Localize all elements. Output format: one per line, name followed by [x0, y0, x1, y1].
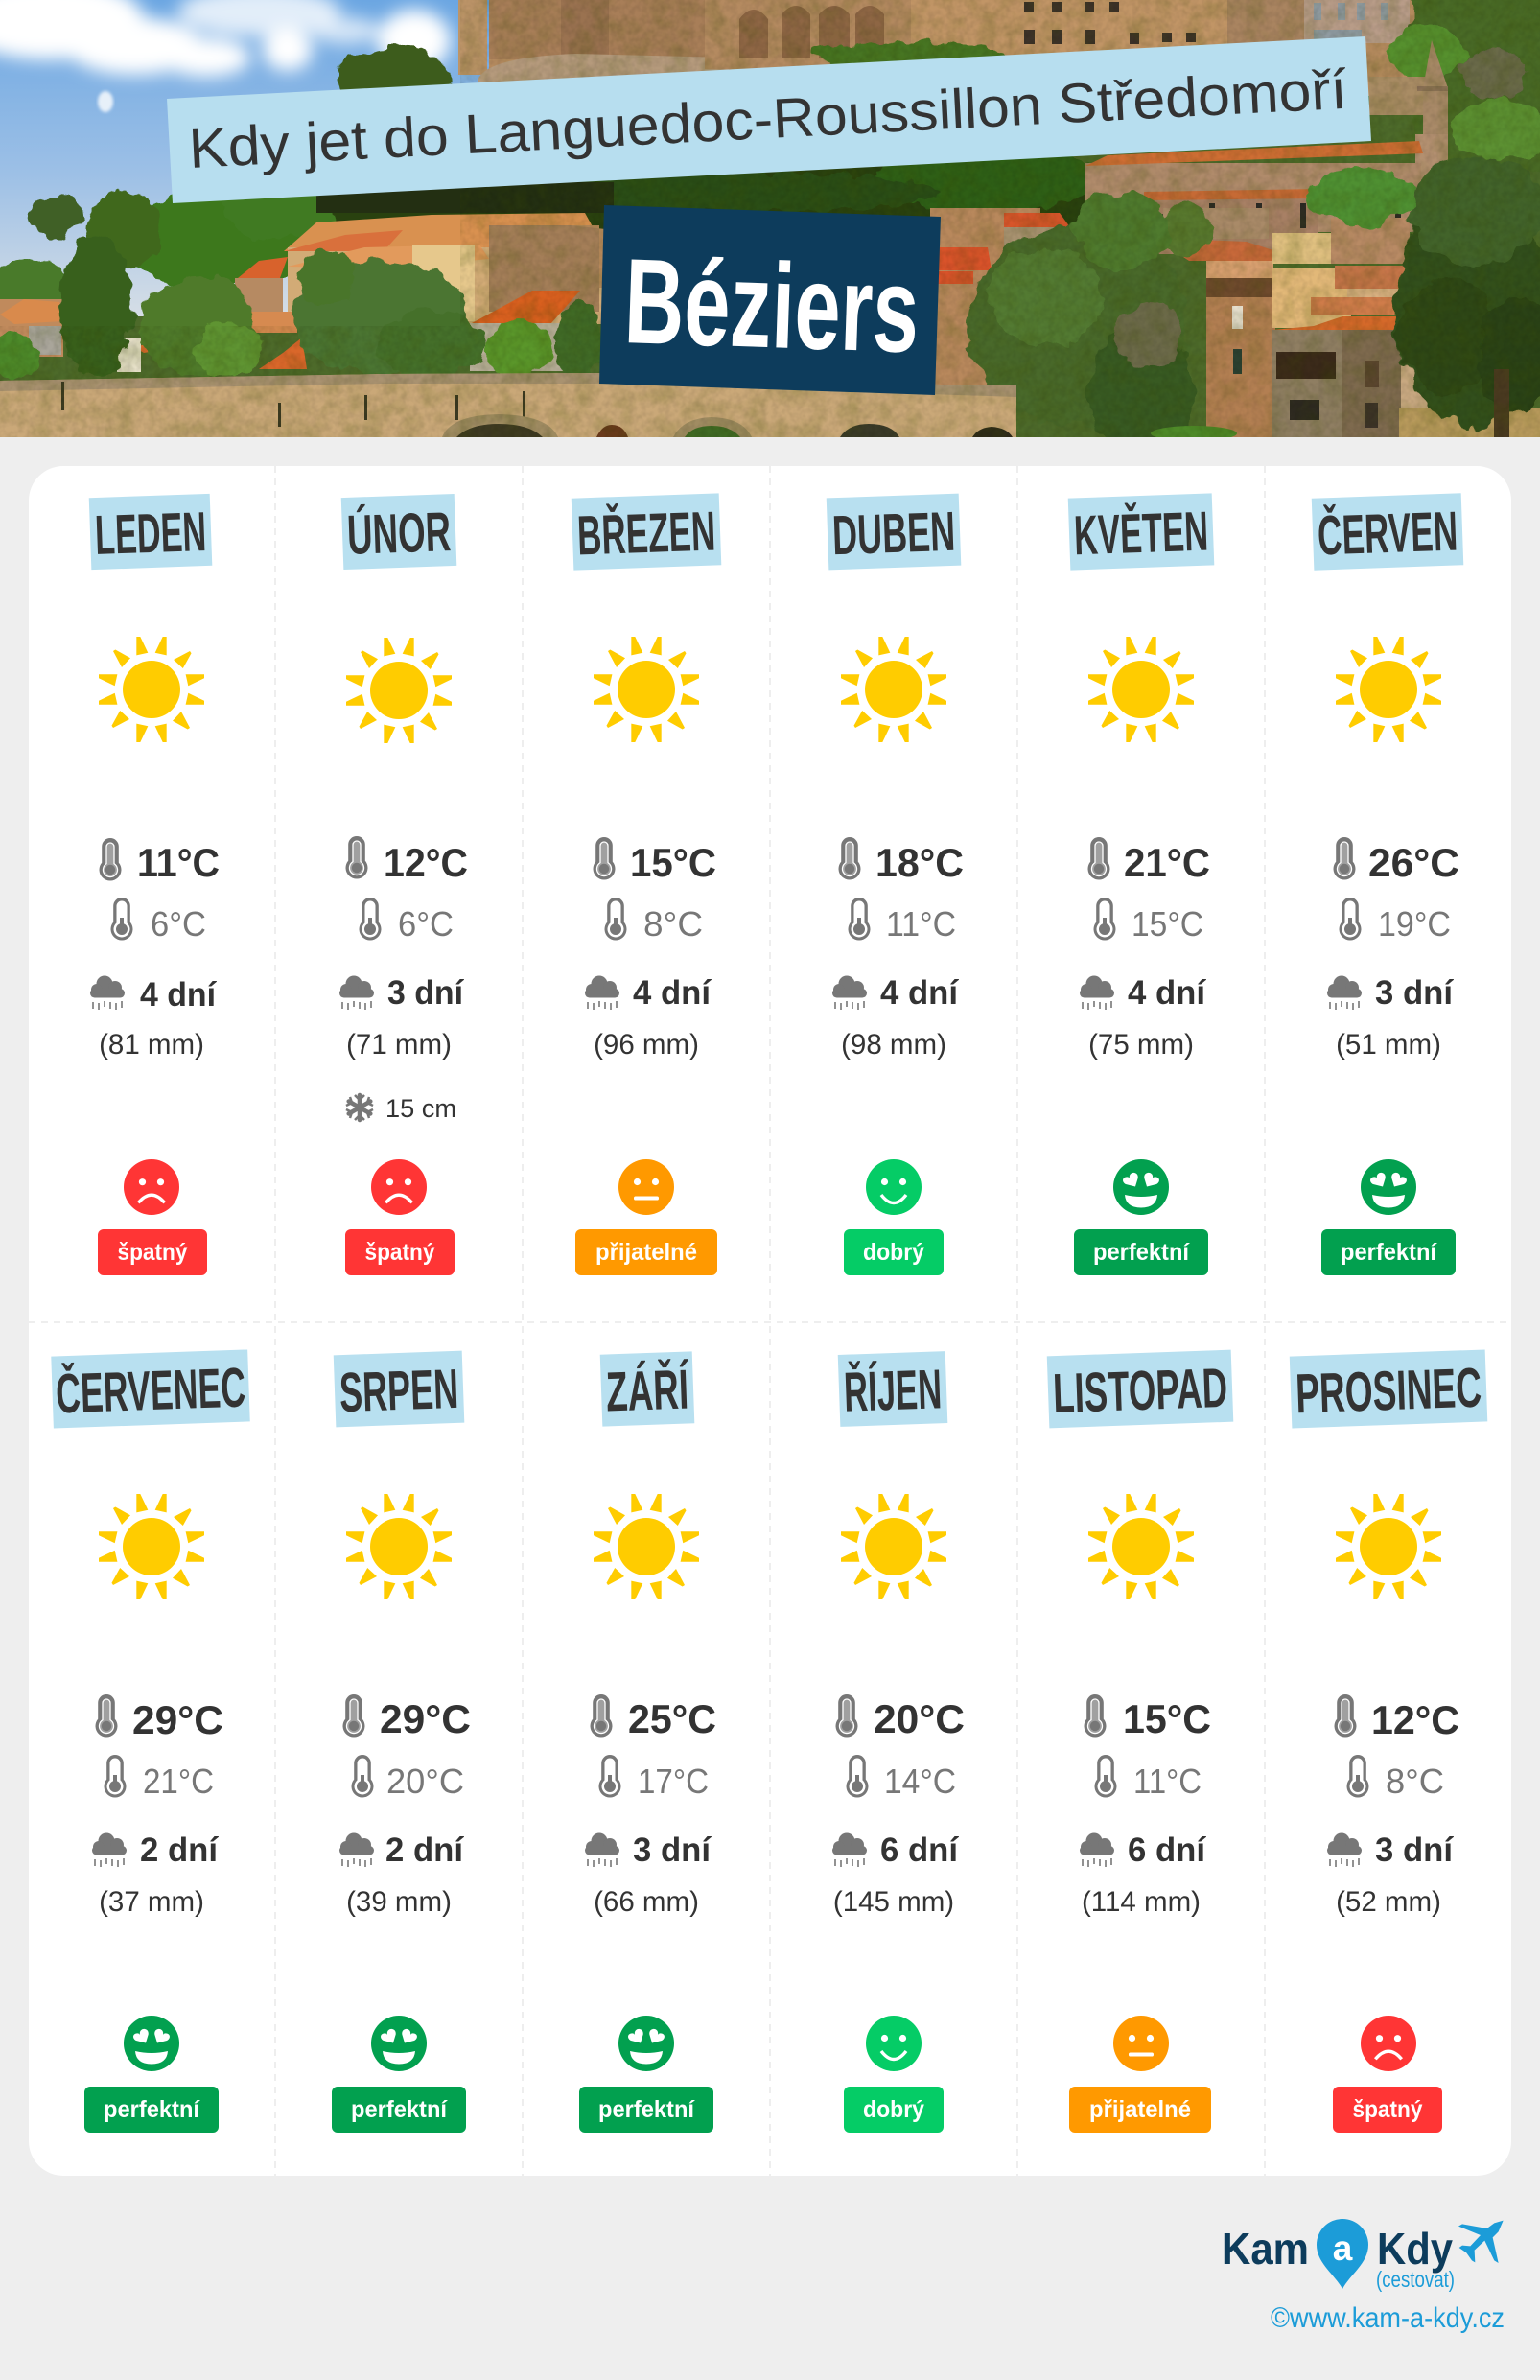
high temperature: 20°C	[874, 1696, 965, 1741]
badge: dobrý	[844, 1229, 944, 1275]
high temperature	[100, 838, 220, 885]
title text: Kdy jet do Languedoc-Roussillon Středomoří	[187, 58, 1348, 180]
low temperature: 6°C	[151, 904, 206, 944]
low temperature: 17°C	[638, 1762, 709, 1801]
badge: špatný	[98, 1229, 207, 1275]
rainy days	[339, 974, 464, 1012]
rainy days: 4 dní	[140, 976, 217, 1014]
month heading: ÚNOR	[341, 494, 456, 570]
badge: špatný: špatný	[364, 1239, 435, 1266]
month heading: SRPEN: SRPEN	[338, 1358, 459, 1424]
low temperature: 14°C	[884, 1762, 956, 1801]
rainfall: (66 mm)	[594, 1886, 699, 1918]
rainy days: 6 dní	[1128, 1832, 1206, 1869]
logo: Kam a Kdy: Kdy	[1377, 2224, 1453, 2274]
badge: přijatelné: přijatelné	[1089, 2096, 1191, 2123]
badge: špatný	[345, 1229, 455, 1275]
high temperature: 21°C	[1124, 840, 1210, 885]
month heading: DUBEN	[827, 494, 961, 570]
rainy days: 3 dní	[387, 974, 464, 1012]
high temperature: 11°C	[137, 840, 220, 885]
badge: špatný	[1333, 2087, 1442, 2133]
low temperature: 6°C	[398, 904, 454, 944]
icon: sun	[594, 637, 699, 742]
badge: perfektní: perfektní	[104, 2096, 200, 2123]
rainfall: (71 mm)	[346, 1029, 452, 1061]
icon: sad face	[124, 1159, 179, 1215]
panel: září	[579, 1351, 716, 2133]
icon: sad face	[1361, 2016, 1416, 2071]
badge: perfektní	[84, 2087, 219, 2133]
rainfall: (96 mm)	[594, 1029, 699, 1061]
icon: sun	[346, 638, 452, 743]
badge: špatný: špatný	[117, 1239, 188, 1266]
castle	[458, 0, 1415, 96]
high temperature: 15°C	[1123, 1696, 1211, 1741]
rainy days	[339, 1832, 464, 1869]
high temperature	[591, 1694, 716, 1741]
badge: perfektní: perfektní	[1093, 1239, 1190, 1266]
rainy days	[1327, 1832, 1454, 1869]
rainy days	[832, 1832, 959, 1869]
badge: špatný: špatný	[1352, 2096, 1423, 2123]
badge: dobrý: dobrý	[863, 2096, 924, 2123]
month heading: BŘEZEN: BŘEZEN	[576, 501, 716, 567]
icon: sun	[841, 637, 946, 742]
icon: sad face	[371, 1159, 427, 1215]
month heading: ÚNOR: ÚNOR	[346, 501, 452, 567]
snowfall	[346, 1094, 456, 1123]
rainy days	[832, 974, 959, 1012]
icon: heart-eyes face	[1361, 1159, 1416, 1215]
rainy days: 3 dní	[1375, 1832, 1454, 1869]
low temperature	[359, 898, 454, 944]
month heading: ZÁŘÍ: ZÁŘÍ	[605, 1358, 690, 1423]
rainy days	[1327, 974, 1454, 1012]
month heading: ČERVENEC	[51, 1349, 250, 1429]
badge: perfektní	[332, 2087, 466, 2133]
icon: sun	[99, 1494, 204, 1599]
rainy days	[1080, 974, 1206, 1012]
rainy days	[90, 976, 217, 1014]
rainfall: (52 mm)	[1336, 1886, 1441, 1918]
icon: sun	[346, 1494, 452, 1599]
panel: květen	[1068, 493, 1214, 1275]
logo: Kam a Kdy: Kam	[1222, 2224, 1309, 2274]
low temperature: 19°C	[1378, 904, 1451, 944]
month heading: LEDEN	[89, 494, 212, 570]
badge: perfektní: perfektní	[1341, 1239, 1437, 1266]
low temperature	[846, 1755, 956, 1801]
high temperature: 15°C	[630, 840, 716, 885]
panel: leden	[89, 494, 220, 1275]
rainy days	[92, 1832, 219, 1869]
badge: perfektní: perfektní	[598, 2096, 695, 2123]
low temperature: 11°C	[1133, 1762, 1202, 1801]
icon: sun	[1088, 1494, 1194, 1599]
rainy days: 2 dní	[385, 1832, 464, 1869]
rainfall: (98 mm)	[841, 1029, 946, 1061]
icon: sun	[99, 637, 204, 742]
foreground trees	[0, 168, 1414, 381]
icon: sun	[594, 1494, 699, 1599]
high temperature: 12°C	[384, 840, 468, 885]
rainy days: 3 dní	[1375, 974, 1454, 1012]
icon: smiling face	[866, 1159, 922, 1215]
icon: sun	[1088, 637, 1194, 742]
icon: map pin	[1317, 2219, 1368, 2289]
high temperature	[1335, 1694, 1459, 1742]
month heading: LISTOPAD	[1047, 1350, 1233, 1428]
logo: Kam a Kdy	[1222, 2219, 1504, 2292]
month heading: ČERVENEC: ČERVENEC	[55, 1357, 246, 1425]
high temperature: 25°C	[628, 1696, 716, 1741]
panel: duben	[827, 494, 964, 1275]
city label: Béziers: Béziers	[622, 233, 922, 378]
rainfall: (51 mm)	[1336, 1029, 1441, 1061]
panel: červenec	[51, 1349, 250, 2133]
month heading: ČERVEN	[1312, 493, 1463, 571]
low temperature: 11°C	[886, 904, 956, 944]
high temperature: 12°C	[1371, 1697, 1459, 1742]
low temperature	[848, 898, 956, 944]
rainy days: 6 dní	[880, 1832, 959, 1869]
badge: perfektní	[579, 2087, 713, 2133]
panel: listopad	[1047, 1350, 1233, 2133]
icon: smiling face	[866, 2016, 922, 2071]
month heading: BŘEZEN	[572, 493, 721, 571]
rainy days: 3 dní	[633, 1832, 712, 1869]
icon: map pin: a	[1333, 2228, 1353, 2268]
rainy days: 4 dní	[1128, 974, 1206, 1012]
low temperature	[604, 898, 703, 944]
high temperature: 29°C	[132, 1697, 223, 1742]
high temperature	[1084, 1694, 1211, 1741]
high temperature	[1333, 837, 1459, 885]
icon: neutral face	[618, 1159, 674, 1215]
icon: sun	[1336, 1494, 1441, 1599]
logo: Kam a Kdy: (cestovat)	[1376, 2267, 1455, 2292]
month heading: LEDEN: LEDEN	[94, 501, 207, 567]
rainfall: (39 mm)	[346, 1886, 452, 1918]
rainfall: (37 mm)	[99, 1886, 204, 1918]
dark forest band	[307, 163, 1103, 230]
badge: perfektní: perfektní	[351, 2096, 448, 2123]
badge: přijatelné: přijatelné	[595, 1239, 697, 1266]
month heading: ŘÍJEN: ŘÍJEN	[843, 1358, 943, 1424]
low temperature: 15°C	[1132, 904, 1203, 944]
high temperature	[836, 1694, 965, 1741]
low temperature	[104, 1755, 214, 1801]
panel: červen	[1312, 493, 1463, 1275]
icon: heart-eyes face	[618, 2016, 674, 2071]
badge: dobrý	[844, 2087, 944, 2133]
rainfall: (81 mm)	[99, 1029, 204, 1061]
panel: říjen	[832, 1351, 965, 2133]
high temperature: 18°C	[875, 840, 964, 885]
rainy days: 4 dní	[880, 974, 959, 1012]
high temperature	[343, 1694, 471, 1741]
rainy days	[585, 974, 712, 1012]
rainy days: 2 dní	[140, 1832, 219, 1869]
low temperature: 20°C	[386, 1762, 464, 1801]
low temperature	[1339, 898, 1451, 944]
rainy days	[1080, 1832, 1206, 1869]
low temperature	[111, 898, 206, 944]
title banner	[167, 36, 1371, 203]
high temperature: 29°C	[380, 1696, 471, 1741]
bridge	[0, 373, 1016, 437]
high temperature: 26°C	[1368, 840, 1459, 885]
badge: perfektní	[1321, 1229, 1456, 1275]
low temperature: 8°C	[1386, 1762, 1444, 1801]
month heading: DUBEN: DUBEN	[831, 501, 956, 567]
rainfall: (114 mm)	[1082, 1886, 1201, 1918]
month heading: KVĚTEN: KVĚTEN	[1073, 501, 1209, 567]
spire	[1423, 40, 1448, 134]
low temperature: 21°C	[143, 1762, 214, 1801]
snowfall: 15 cm	[385, 1094, 456, 1123]
high temperature	[593, 837, 716, 885]
icon: plane	[1458, 2221, 1504, 2263]
high temperature	[345, 836, 468, 885]
badge: přijatelné	[1069, 2087, 1211, 2133]
low temperature	[598, 1755, 709, 1801]
panel: srpen	[332, 1351, 471, 2133]
badge: dobrý: dobrý	[863, 1239, 924, 1266]
low temperature	[351, 1755, 464, 1801]
low temperature	[1095, 1755, 1202, 1801]
icon: heart-eyes face	[1113, 1159, 1169, 1215]
church	[1085, 163, 1421, 232]
panel: únor	[339, 494, 468, 1275]
panel: březen	[572, 493, 721, 1275]
rainfall: (145 mm)	[833, 1886, 954, 1918]
month heading: KVĚTEN	[1068, 493, 1214, 571]
panel: monthly climate card	[29, 466, 1511, 2176]
greenery behind banner	[336, 0, 1540, 173]
low temperature	[1093, 898, 1203, 944]
rainy days: 4 dní	[633, 974, 712, 1012]
low temperature	[1346, 1755, 1444, 1801]
badge: perfektní	[1074, 1229, 1208, 1275]
low temperature: 8°C	[643, 904, 703, 944]
icon: heart-eyes face	[124, 2016, 179, 2071]
rainfall: (75 mm)	[1088, 1029, 1194, 1061]
panel: prosinec	[1290, 1349, 1487, 2133]
header photo: Béziers townscape	[0, 0, 1540, 460]
rainy days	[585, 1832, 712, 1869]
month heading: LISTOPAD: LISTOPAD	[1052, 1357, 1228, 1425]
icon: heart-eyes face	[371, 2016, 427, 2071]
month heading: ŘÍJEN	[838, 1351, 947, 1427]
city label: Béziers	[599, 205, 941, 395]
high temperature	[838, 837, 964, 885]
icon: sun	[841, 1494, 946, 1599]
icon: neutral face	[1113, 2016, 1169, 2071]
left village	[284, 213, 595, 251]
high temperature	[1087, 837, 1210, 885]
website url: ©www.kam-a-kdy.cz	[1271, 2302, 1505, 2334]
high temperature	[96, 1694, 223, 1742]
badge: přijatelné	[575, 1229, 717, 1275]
month heading: ZÁŘÍ	[600, 1351, 694, 1427]
month heading: SRPEN	[334, 1351, 464, 1427]
photo texture	[0, 0, 1540, 437]
right buildings	[930, 208, 1040, 385]
icon: sun	[1336, 637, 1441, 742]
